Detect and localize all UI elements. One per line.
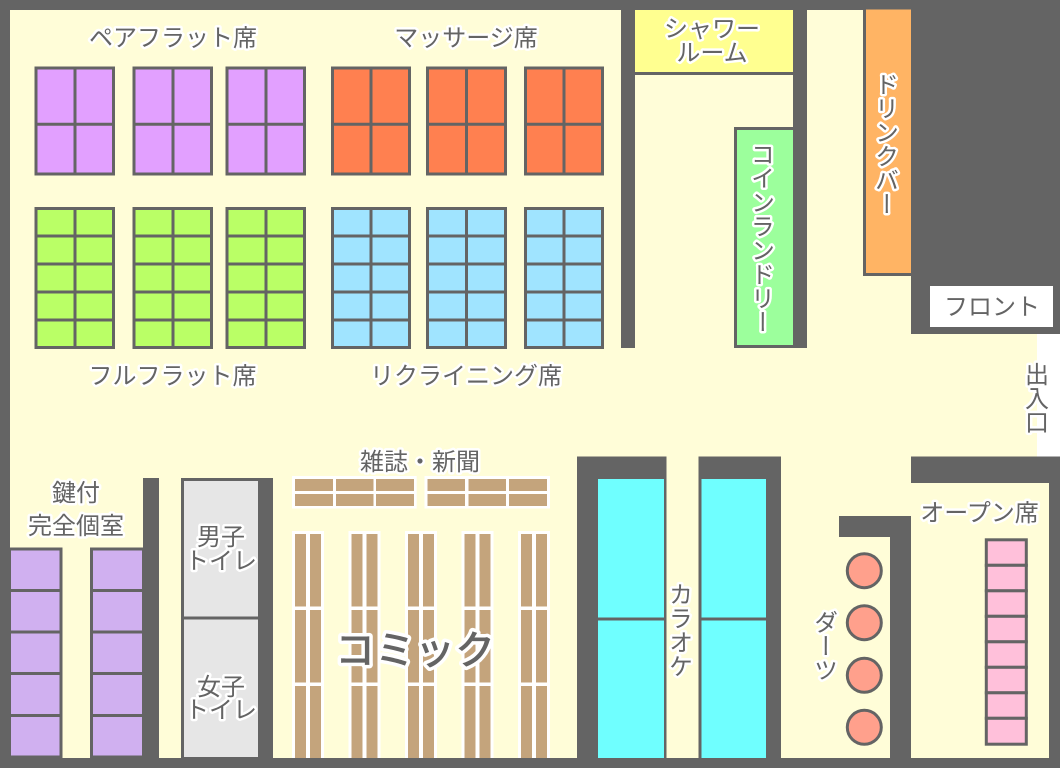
panel: drink bar bbox=[864, 8, 912, 274]
panel: toilets: 男子 bbox=[197, 524, 245, 551]
panel: coin laundry bbox=[736, 128, 794, 346]
heading: pair flat seats: ペアフラット席 bbox=[89, 25, 257, 52]
panel: toilets: トイレ bbox=[185, 548, 257, 575]
panel: shower room: ルーム bbox=[676, 40, 748, 67]
label: darts: ダーツ bbox=[810, 610, 836, 682]
entrance opening bbox=[1037, 334, 1060, 457]
panel: magazine shelves bbox=[292, 476, 550, 508]
panel: drink bar: ドリンクバー bbox=[870, 72, 898, 216]
panel: private rooms left column bbox=[10, 549, 61, 757]
panel: shower room bbox=[635, 10, 793, 75]
panel: shower room: シャワー bbox=[664, 16, 760, 43]
heading: open seats: オープン席 bbox=[920, 500, 1039, 527]
heading: lockable private rooms bbox=[28, 480, 124, 540]
heading: reclining seats: リクライニング席 bbox=[370, 363, 562, 390]
panel: karaoke rooms bbox=[598, 479, 766, 758]
heading: magazines and newspapers: 雑誌・新聞 bbox=[360, 449, 480, 476]
panel: reclining seats bbox=[332, 208, 602, 348]
panel: toilets: トイレ bbox=[185, 697, 257, 724]
panel: toilets: 女子 bbox=[197, 674, 245, 701]
heading: lockable private rooms: 鍵付 bbox=[52, 480, 100, 507]
panel: coin laundry: コインランドリー bbox=[746, 142, 774, 334]
label: comics: コミック bbox=[335, 629, 495, 673]
panel: front desk bbox=[930, 286, 1053, 327]
heading: massage seats: マッサージ席 bbox=[394, 25, 538, 52]
heading: full flat seats: フルフラット席 bbox=[88, 363, 256, 390]
panel: front desk: フロント bbox=[944, 294, 1040, 321]
panel: comic shelves bbox=[292, 531, 550, 758]
panel: private rooms right column bbox=[92, 549, 144, 757]
panel: pair flat seats bbox=[36, 68, 304, 174]
panel: toilets bbox=[182, 480, 260, 758]
panel: full flat seats bbox=[36, 208, 304, 348]
heading: lockable private rooms: 完全個室 bbox=[28, 513, 124, 540]
panel: dart boards bbox=[847, 554, 881, 744]
label: entrance: 出入口 bbox=[1020, 362, 1048, 434]
panel: massage seats bbox=[332, 68, 602, 174]
panel: karaoke rooms: カラオケ bbox=[664, 582, 692, 678]
panel: open seats bbox=[986, 540, 1026, 744]
